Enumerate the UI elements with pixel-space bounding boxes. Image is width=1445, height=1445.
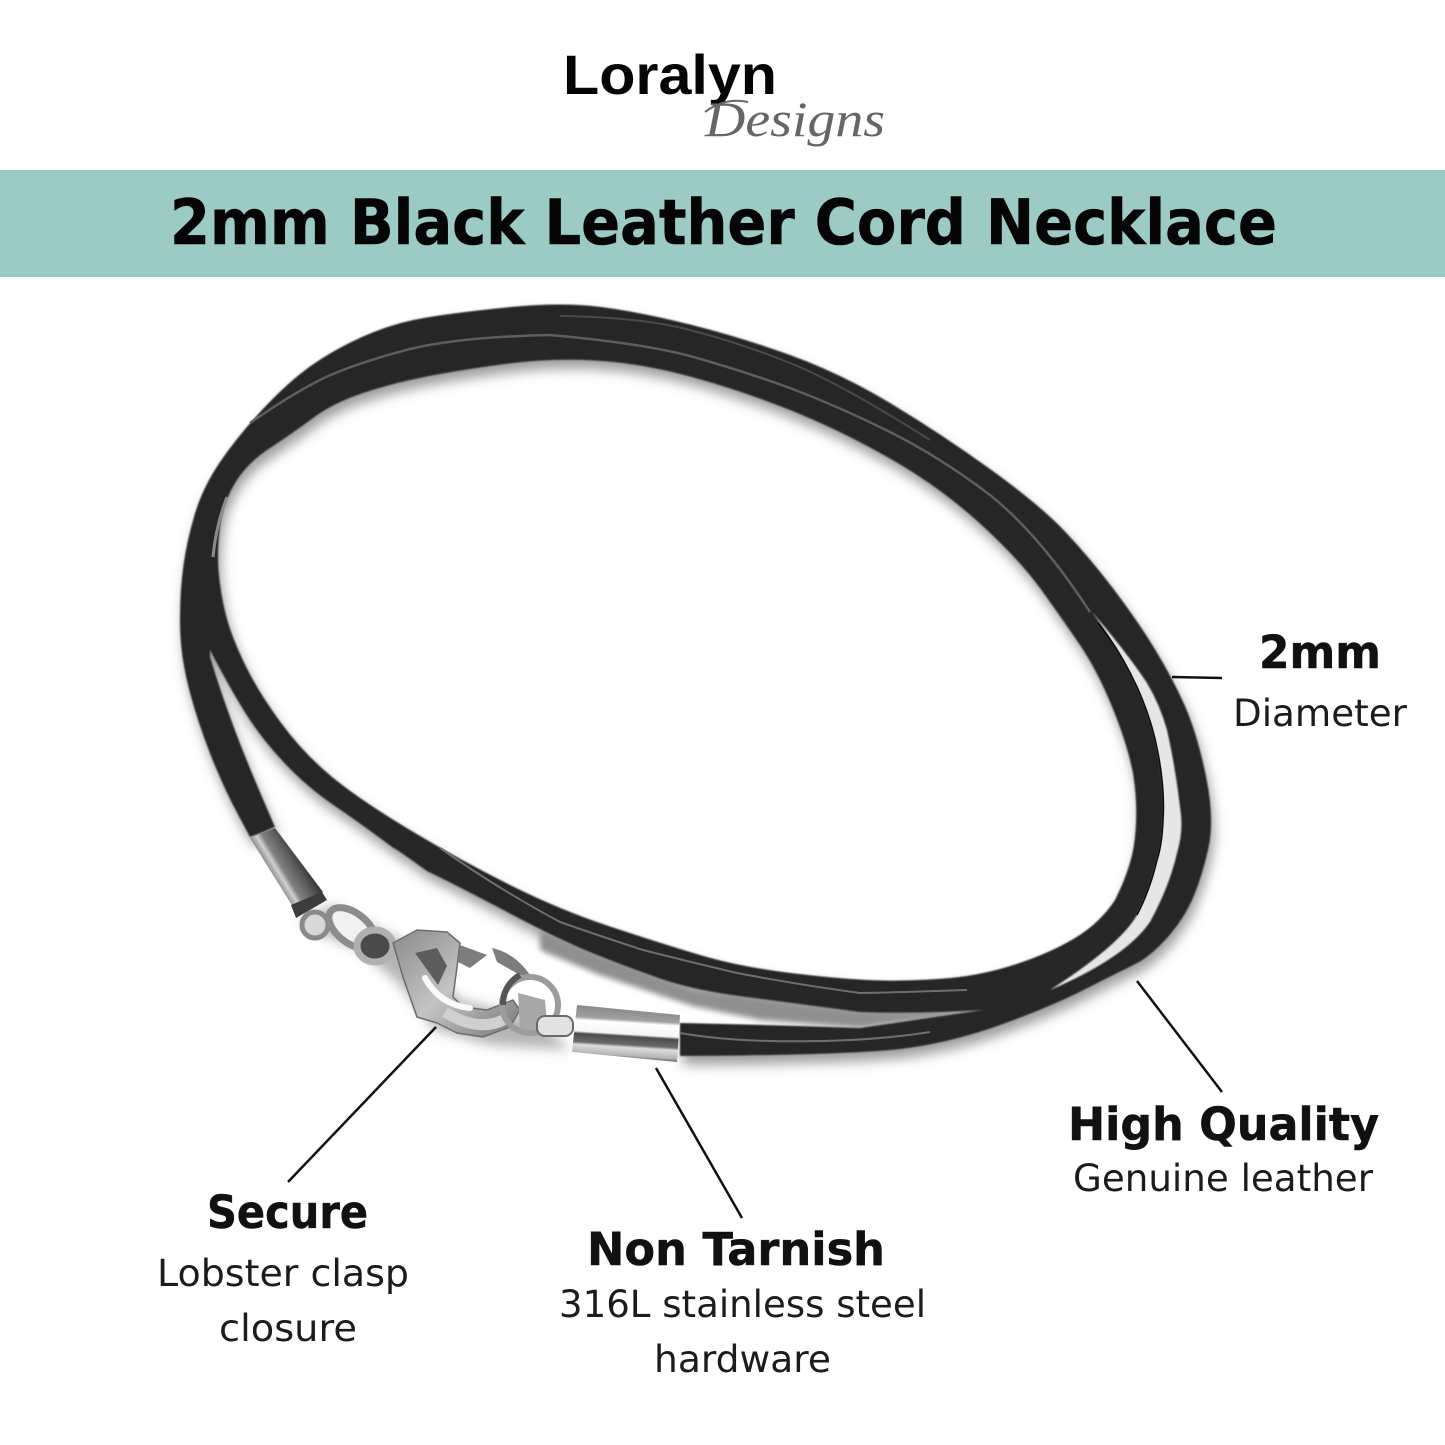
- gap between strands on the right: [1050, 612, 1181, 990]
- label: secure: Lobster clasp: [157, 1252, 409, 1295]
- label: high quality: Genuine leather: [1073, 1157, 1374, 1200]
- logo: Loralyn Designs: Designs: [704, 91, 885, 147]
- photo: black leather cord necklace: [180, 304, 1214, 1065]
- seam between strands at the top: [250, 335, 1090, 612]
- upper strand highlight: [560, 316, 930, 440]
- title banner: [0, 170, 1445, 277]
- neck of right ferrule: [537, 1016, 573, 1036]
- label: non tarnish: Non Tarnish: [587, 1223, 885, 1276]
- label: secure: [157, 1186, 409, 1350]
- shadow sliver on the inner left: [213, 497, 227, 557]
- right ring: [502, 977, 558, 1033]
- leader line: secure: [288, 1027, 436, 1182]
- small ring left: [302, 912, 328, 938]
- logo: Loralyn Designs: Loralyn: [563, 43, 777, 106]
- link ring: [321, 900, 383, 956]
- label: high quality: [1068, 1098, 1379, 1200]
- label: 2mm diameter: [1233, 626, 1408, 735]
- clasp top ring: [357, 930, 393, 962]
- left ferrule: [250, 828, 323, 907]
- right ferrule: [572, 1005, 680, 1062]
- leather cord: [180, 304, 1211, 1056]
- title banner: 2mm Black Leather Cord Necklace: [170, 186, 1277, 259]
- ring fill: [518, 993, 548, 1036]
- label: non tarnish: 316L stainless steel: [559, 1283, 926, 1326]
- label: secure: Secure: [207, 1186, 368, 1239]
- inner ring: [503, 975, 520, 1005]
- clasp soft shadow: [300, 905, 570, 1050]
- crease along the inner strand: [1098, 623, 1163, 915]
- clasp bottom: [445, 1012, 507, 1025]
- clasp highlight: [425, 978, 470, 1008]
- label: high quality: High Quality: [1068, 1098, 1379, 1151]
- leader line: non tarnish: [656, 1068, 742, 1218]
- shadow between the lower strands: [540, 930, 960, 1028]
- left crimp end: [291, 892, 327, 918]
- label: 2mm diameter: 2mm: [1259, 626, 1381, 679]
- label: non tarnish: [559, 1223, 926, 1381]
- lobster clasp and rings: [291, 892, 573, 1050]
- cord shadow: [183, 314, 1214, 1065]
- logo: Loralyn Designs: [563, 43, 885, 147]
- label: secure: closure: [219, 1307, 357, 1350]
- leader line: high quality: [1137, 981, 1222, 1092]
- clasp gate: [458, 945, 530, 975]
- cord highlights: [440, 848, 967, 1041]
- label: 2mm diameter: Diameter: [1233, 692, 1408, 735]
- label: non tarnish: hardware: [654, 1338, 831, 1381]
- leader line: diameter: [1172, 677, 1222, 678]
- lobster body: [393, 930, 520, 1037]
- clasp inner opening: [415, 948, 447, 985]
